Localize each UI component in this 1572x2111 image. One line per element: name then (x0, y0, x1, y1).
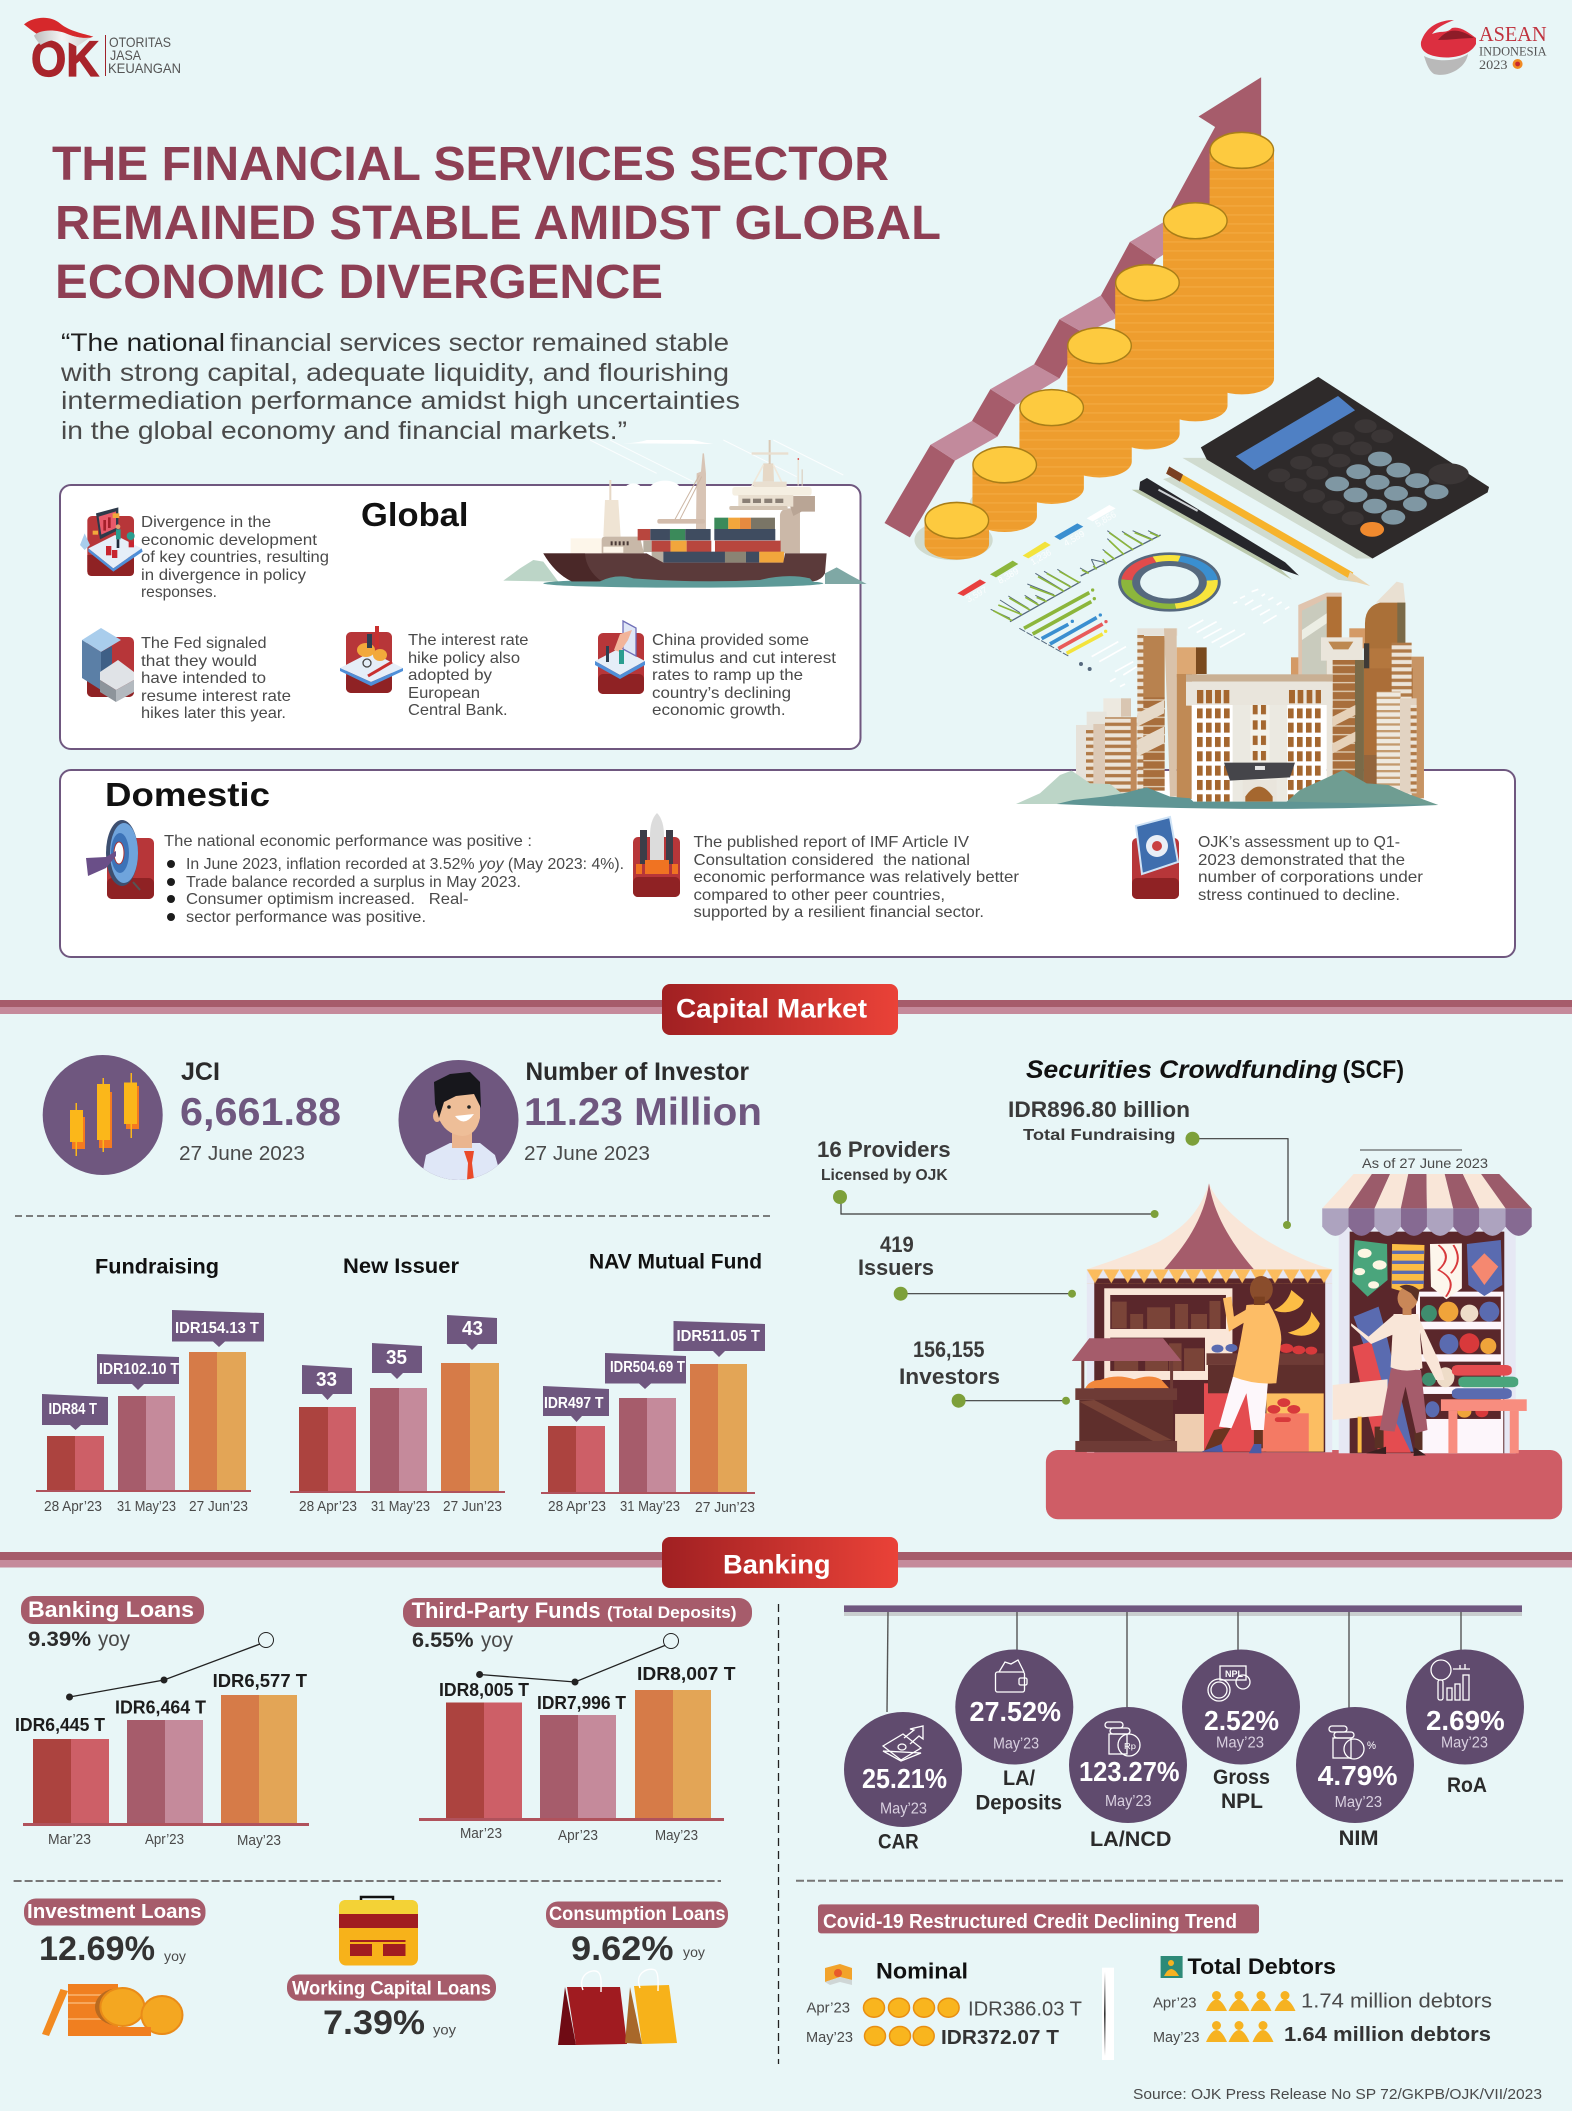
chart: NAV mutual fund: 31 May’23 (620, 1499, 680, 1515)
ratio: LA/NCD: Rp (1124, 1742, 1137, 1751)
chart: new issuer: 27 Jun’23 (443, 1499, 502, 1515)
title: REMAINED STABLE AMIDST GLOBAL (55, 197, 941, 250)
ratio: gross NPL (1182, 1612, 1300, 1813)
chart: third-party funds: IDR7,996 T (537, 1693, 626, 1713)
legend blocks (957, 505, 1118, 604)
icon: NPL magnifier (1208, 1666, 1250, 1701)
quote text: “The national (61, 329, 225, 357)
text: national economic performance: Trade balance recorded a surplus in May 2023. (186, 874, 521, 891)
stat: working capital loans: yoy (433, 2022, 456, 2038)
chart: third-party funds: May’23 (655, 1827, 698, 1844)
stat: number of investor: 27 June 2023 (524, 1143, 650, 1165)
illustration: cargo ship (503, 440, 867, 588)
ratio: gross NPL: Gross (1213, 1766, 1270, 1789)
chart: NAV mutual fund (541, 1250, 765, 1516)
callout: providers: Licensed by OJK (821, 1167, 948, 1184)
text: IMF Article IV: The published report of IMF Article IV (694, 834, 969, 851)
icon: calculator (1182, 377, 1489, 559)
panel: nominal: Nominal (876, 1959, 968, 1984)
panel: nominal (806, 1959, 1082, 2049)
callout: providers: 16 Providers (817, 1137, 951, 1162)
ratio: NIM (1296, 1612, 1414, 1850)
stat: JCI: 6,661.88 (180, 1091, 341, 1134)
chart: NAV mutual fund: 27 Jun’23 (695, 1500, 755, 1516)
text: IMF Article IV: supported by a resilient financial sector. (694, 904, 984, 921)
text: divergence: of key countries, resulting (141, 549, 329, 566)
stat: investment loans: 12.69% (39, 1930, 155, 1968)
callout: total fundraising: IDR896.80 billion (1008, 1097, 1190, 1122)
ratio: LA/NCD: LA/NCD (1090, 1828, 1172, 1851)
chart: banking loans: IDR6,577 T (213, 1671, 307, 1691)
glass tower (1298, 593, 1342, 680)
right stall (1322, 1174, 1532, 1453)
text: divergence: in divergence in policy (141, 567, 306, 584)
section band: capital market: Capital Market (676, 994, 867, 1024)
ratio: NIM: % (1367, 1740, 1376, 1752)
ratio: gross NPL: 2.52% (1204, 1705, 1279, 1736)
chart: new issuer: 43 (462, 1318, 483, 1340)
panel: nominal: May’23 (806, 2029, 853, 2046)
icon: Fed building (82, 628, 134, 702)
panel: total debtors (1153, 1954, 1492, 2046)
bank ratios hanger bar (844, 1605, 1522, 1616)
chart: fundraising: IDR84 T (48, 1401, 97, 1418)
chart: banking loans (15, 1596, 309, 1849)
title: ECONOMIC DIVERGENCE (55, 256, 663, 309)
panel: total debtors: May’23 (1153, 2029, 1200, 2046)
section band: banking: Banking (723, 1550, 831, 1580)
text: national economic performance: Consumer optimism increased. Real- (186, 891, 468, 908)
legend blocks: 3,597 (964, 584, 989, 604)
callout: total fundraising: Total Fundraising (1023, 1127, 1176, 1144)
chart: banking loans: IDR6,445 T (15, 1715, 105, 1735)
icon: coins percent (1329, 1726, 1364, 1759)
ratio: NIM: NIM (1339, 1827, 1379, 1850)
chart: banking loans: Apr’23 (145, 1831, 184, 1848)
tall tower left (1137, 628, 1207, 799)
text: divergence: responses. (141, 584, 217, 601)
chart: new issuer: 33 (316, 1369, 337, 1391)
callout: total fundraising (1008, 1097, 1291, 1229)
chart: third-party funds: yoy (481, 1629, 513, 1652)
chart: banking loans: Mar’23 (48, 1831, 91, 1848)
chart: third-party funds: Third-Party Funds (412, 1598, 601, 1623)
note: as of date: As of 27 June 2023 (1362, 1155, 1488, 1171)
illustration: city buildings (1016, 582, 1438, 809)
illustration: rising arrow, coins, calculator and chart (885, 77, 1489, 586)
stat: number of investor (524, 1058, 762, 1165)
stat: investment loans: yoy (164, 1948, 186, 1964)
stat: number of investor: 11.23 Million (524, 1091, 762, 1134)
chart: fundraising: Fundraising (95, 1256, 219, 1278)
text: Fed: hikes later this year. (141, 705, 286, 722)
chart: NAV mutual fund: IDR511.05 T (676, 1328, 761, 1345)
legend blocks: 8,389 (996, 566, 1020, 586)
ratio: CAR: May’23 (880, 1801, 927, 1818)
chart: banking loans: IDR6,464 T (115, 1698, 206, 1718)
text: IMF Article IV: economic performance was relatively better (694, 869, 1020, 886)
text: interest rate: Central Bank. (408, 702, 508, 719)
left stall (1072, 1183, 1332, 1452)
arrow: rising ribbon (885, 77, 1261, 537)
text: interest rate: adopted by (408, 667, 492, 684)
chart: fundraising: IDR102.10 T (99, 1361, 179, 1378)
icon: banknote (825, 1964, 852, 1985)
stat: number of investor: Number of Investor (526, 1058, 749, 1086)
icon: China stimulus (595, 621, 645, 694)
callout: issuers: Issuers (858, 1255, 934, 1280)
title (52, 138, 941, 309)
chart: third-party funds: 6.55% (412, 1629, 474, 1652)
logo: OJK: JASA (110, 47, 142, 63)
stat: working capital loans: 7.39% (323, 2004, 425, 2042)
quote text: in the global economy and financial markets.” (61, 417, 627, 445)
text: Fed: have intended to (141, 670, 266, 687)
chart: banking loans: 9.39% (28, 1628, 91, 1651)
heading: securities crowdfunding: Securities Crowdfunding (1026, 1056, 1338, 1084)
logo: OJK: OK (31, 31, 99, 87)
icon: pencil (1163, 470, 1370, 586)
ratio: RoA: 2.69% (1426, 1705, 1505, 1736)
panel: nominal: IDR372.07 T (941, 2027, 1059, 2049)
text: national economic performance: In June 2023, inflation recorded at 3.52% yoy (May 2023: 4%). (186, 856, 624, 873)
chart: third-party funds (403, 1598, 752, 1844)
section band: banking (0, 1537, 1572, 1588)
text: interest rate (408, 632, 529, 719)
left shopper (1202, 1276, 1281, 1453)
panel: nominal: Apr’23 (806, 1999, 850, 2016)
text: China: country’s declining (652, 685, 791, 702)
heading: securities crowdfunding: (SCF) (1343, 1056, 1404, 1084)
text: OJK assessment: 2023 demonstrated that the (1198, 852, 1405, 869)
chart: fundraising: 31 May’23 (117, 1499, 176, 1515)
ratio: LA/Deposits: Deposits (976, 1792, 1062, 1815)
chart: NAV mutual fund: 28 Apr’23 (548, 1499, 606, 1515)
ratio: LA/NCD: 123.27% (1079, 1756, 1180, 1787)
ratio: LA/Deposits: LA/ (1003, 1767, 1035, 1790)
chart: banking loans: yoy (98, 1628, 130, 1651)
legend blocks: 4,589 (1062, 528, 1086, 548)
ratio: gross NPL: NPL (1225, 1669, 1244, 1679)
text: China (652, 632, 837, 719)
ratio: NIM: May’23 (1335, 1794, 1382, 1811)
ratio: RoA: RoA (1447, 1774, 1487, 1797)
quote text (60, 329, 740, 445)
ratio: CAR: CAR (878, 1830, 919, 1854)
icon: divergence chart (80, 507, 143, 576)
heading: domestic: Domestic (105, 776, 270, 813)
chart: third-party funds: Mar’23 (460, 1825, 502, 1842)
icon: analytics magnifier (1431, 1660, 1470, 1700)
callout: providers (817, 1137, 1159, 1218)
panel: total debtors: Total Debtors (1188, 1954, 1336, 1979)
text: divergence: economic development (141, 532, 318, 549)
bar chart (991, 569, 1081, 622)
bar chart (1080, 531, 1161, 576)
spire tower (1364, 582, 1424, 798)
logo: OJK (24, 18, 181, 87)
panel: total debtors: 1.74 million debtors (1301, 1990, 1492, 2012)
right vendor (1351, 1285, 1444, 1456)
hills (1016, 770, 1438, 809)
illustration: market stalls (1046, 1174, 1562, 1519)
bar list (1019, 588, 1108, 671)
callout: investors: 156,155 (913, 1337, 984, 1362)
chart: third-party funds: IDR8,007 T (637, 1664, 736, 1684)
chart: banking loans: Banking Loans (28, 1597, 194, 1622)
text: national economic performance: The national economic performance was positive : (164, 833, 532, 850)
text: OJK assessment: stress continued to decline. (1198, 887, 1400, 904)
chart: new issuer: New Issuer (343, 1255, 459, 1278)
text: OJK assessment (1198, 834, 1424, 904)
callout: investors (899, 1337, 1070, 1408)
stat: consumption loans (546, 1902, 728, 1968)
chart: new issuer: 35 (386, 1347, 407, 1369)
text: Fed: resume interest rate (141, 688, 291, 705)
chart: new issuer: 28 Apr’23 (299, 1499, 357, 1515)
chart: NAV mutual fund: IDR497 T (544, 1395, 604, 1412)
chart: NAV mutual fund: IDR504.69 T (610, 1359, 685, 1376)
text: IMF Article IV: Consultation considered the national (694, 852, 970, 869)
ratio: LA/NCD (1069, 1612, 1187, 1851)
text: China: stimulus and cut interest (652, 650, 837, 667)
callout: issuers (858, 1232, 1076, 1301)
text: interest rate: hike policy also (408, 650, 520, 667)
icon: investor person (398, 1060, 518, 1180)
stat: JCI: 27 June 2023 (179, 1143, 305, 1165)
legend blocks: 5,856 (1093, 509, 1118, 529)
chart: third-party funds: (Total Deposits) (607, 1603, 736, 1622)
text: Fed: that they would (141, 653, 257, 670)
ratio: RoA (1406, 1612, 1524, 1797)
ratio: CAR: 25.21% (862, 1763, 947, 1794)
quote text: with strong capital, adequate liquidity, and flourishing (60, 359, 729, 387)
legend blocks: 1,236 (1029, 547, 1053, 567)
icon: coin stacks (925, 132, 1274, 560)
panel: global (60, 485, 860, 749)
text: divergence (141, 514, 329, 601)
chart: fundraising: 27 Jun’23 (189, 1499, 248, 1515)
ratio: gross NPL: May’23 (1216, 1735, 1264, 1752)
text: IMF Article IV (694, 834, 1020, 921)
stat: working capital loans (287, 1974, 496, 2042)
source note: Source: OJK Press Release No SP 72/GKPB/OJK/VII/2023 (1133, 2086, 1542, 2103)
text: China: China provided some (652, 632, 809, 649)
text: Fed (141, 635, 291, 722)
callout: investors: Investors (899, 1364, 1000, 1389)
icon: rupiah coins (1105, 1722, 1140, 1756)
icon: JCI candlesticks (43, 1055, 163, 1175)
text: OJK assessment: OJK’s assessment up to Q1- (1198, 834, 1400, 851)
panel: total debtors: Apr’23 (1153, 1994, 1196, 2011)
logo: OJK: OTORITAS (109, 34, 171, 50)
icon: pen (1132, 478, 1299, 580)
icon: rocket (633, 813, 680, 897)
icon: target (86, 820, 154, 899)
text: China: rates to ramp up the (652, 667, 803, 684)
text: interest rate: European (408, 685, 480, 702)
ratio: LA/NCD: May’23 (1105, 1793, 1152, 1810)
low rise left (1076, 698, 1137, 794)
platform (1046, 1450, 1562, 1519)
icon: briefcase (339, 1897, 418, 1966)
stat: JCI (179, 1058, 341, 1165)
ratio: NIM: 4.79% (1318, 1760, 1398, 1791)
chart: fundraising: IDR154.13 T (175, 1320, 259, 1337)
panel: nominal: IDR386.03 T (968, 1998, 1082, 2020)
chart: new issuer: 31 May’23 (371, 1499, 430, 1515)
logo: OJK: KEUANGAN (108, 60, 181, 76)
chart: fundraising (36, 1256, 264, 1515)
ratio: CAR (844, 1612, 962, 1854)
text: divergence: Divergence in the (141, 514, 271, 531)
logo: ASEAN Indonesia 2023: 2023 (1479, 57, 1508, 72)
chart: banking loans: May’23 (237, 1832, 281, 1849)
callout: issuers: 419 (880, 1232, 914, 1257)
logo: ASEAN Indonesia 2023: INDONESIA (1479, 44, 1547, 58)
icon: shopping bags (558, 1969, 677, 2045)
quote text: financial services sector remained stable (230, 329, 729, 357)
panel: domestic (60, 770, 1515, 957)
section band: capital market (0, 984, 1572, 1035)
text: OJK assessment: number of corporations under (1198, 869, 1424, 886)
ratio: LA/Deposits: 27.52% (970, 1696, 1061, 1727)
logo: ASEAN Indonesia 2023 (1421, 20, 1547, 75)
icon: assessment document (1132, 817, 1179, 899)
ratio: LA/Deposits (955, 1612, 1073, 1815)
chart: third-party funds: Apr’23 (558, 1827, 598, 1844)
white tower right (1377, 692, 1417, 793)
chart: report sheet (957, 505, 1289, 687)
logo: ASEAN Indonesia 2023: ASEAN (1479, 22, 1547, 46)
stat: investment loans: Investment Loans (27, 1901, 202, 1923)
panel: total debtors: 1.64 million debtors (1284, 2024, 1491, 2046)
stat: working capital loans: Working Capital Loans (292, 1978, 491, 2000)
text: IMF Article IV: compared to other peer countries, (694, 887, 945, 904)
icon: interest rate (340, 626, 403, 693)
text: national economic performance: sector performance was positive. (186, 909, 426, 926)
central office building (1186, 674, 1333, 802)
quote text: intermediation performance amidst high uncertainties (61, 387, 740, 415)
chart: NAV mutual fund: NAV Mutual Fund (589, 1250, 762, 1274)
icon: wallet (996, 1660, 1027, 1692)
text: national economic performance (164, 833, 624, 926)
icon: money up (883, 1726, 923, 1761)
icon: coins and bars (42, 1984, 182, 2036)
stat: JCI: JCI (181, 1058, 220, 1086)
text: Fed: The Fed signaled (141, 635, 267, 652)
icon: debtor card (1161, 1956, 1183, 1978)
ratio: LA/Deposits: May’23 (993, 1736, 1039, 1753)
stat: investment loans (24, 1898, 206, 1968)
chart: donut (1118, 552, 1221, 612)
heading: global: Global (361, 496, 468, 533)
stat: consumption loans: 9.62% (571, 1930, 674, 1968)
chart: fundraising: 28 Apr’23 (44, 1499, 102, 1515)
stat: consumption loans: yoy (683, 1944, 705, 1960)
text: interest rate: The interest rate (408, 632, 529, 649)
chart: new issuer (290, 1255, 505, 1515)
chart: third-party funds: IDR8,005 T (439, 1680, 529, 1700)
ratio: RoA: May’23 (1441, 1735, 1488, 1752)
stat: consumption loans: Consumption Loans (549, 1904, 726, 1925)
ratio: gross NPL: NPL (1221, 1790, 1263, 1813)
frame tower (1321, 637, 1364, 785)
text: China: economic growth. (652, 702, 786, 719)
heading: covid-19 restructured credit: Covid-19 Restructured Credit Declining Trend (823, 1911, 1237, 1933)
title: THE FINANCIAL SERVICES SECTOR (52, 138, 889, 191)
